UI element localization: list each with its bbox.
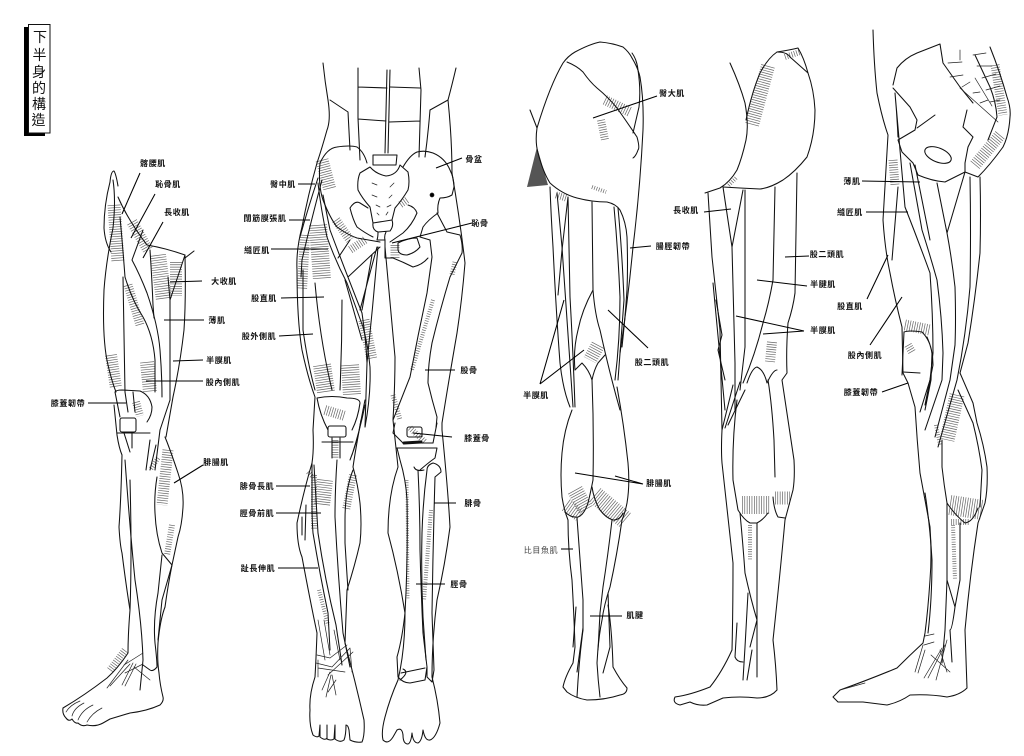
- anterior lower-leg muscles: [302, 460, 353, 667]
- knee and patella: [115, 390, 152, 452]
- labels: medial view: 恥骨肌: [155, 179, 181, 189]
- ankle tendons: [840, 634, 950, 690]
- labels: anterior view: 骨盆: [465, 154, 483, 164]
- labels: anterior view: [240, 154, 490, 589]
- shading: lateral hatching: [893, 65, 1003, 580]
- labels: lateral view: [837, 176, 920, 397]
- labels: anterior view: 闊筋膜張肌: [244, 213, 286, 223]
- labels: posterior view: 臀大肌: [659, 88, 685, 98]
- labels: lateral-posterior view: 半腱肌: [810, 279, 836, 289]
- abdominal muscles: [330, 68, 448, 160]
- figure: anterior view with muscles and skeleton: [297, 63, 465, 744]
- labels: medial view: 半膜肌: [206, 355, 232, 365]
- figure: lateral-posterior view of leg: [673, 48, 844, 705]
- sacrum foramina: [372, 183, 434, 215]
- gluteus and outer outline: [530, 42, 643, 353]
- vertebrae: [948, 50, 1000, 122]
- femur lower end, patella, tibia and fibula: [393, 423, 441, 683]
- labels: posterior view: 腓腸肌: [646, 478, 672, 488]
- labels: medial view: [51, 158, 240, 483]
- figure: lateral view with pelvis and spine: [833, 30, 1010, 705]
- shading: muscle hatching: [110, 205, 176, 670]
- thigh straps and knee: [892, 93, 980, 447]
- thigh outlines: [104, 171, 194, 400]
- lower-leg lines and ankle: [925, 440, 978, 663]
- labels: posterior view: [523, 88, 690, 620]
- shading: posterior hatching: [527, 100, 630, 520]
- ankle retinaculum: [316, 620, 353, 697]
- knee and patella (muscled leg): [317, 396, 365, 460]
- labels: anterior view: 股直肌: [251, 293, 277, 303]
- labels: anterior view: 脛骨: [450, 580, 468, 589]
- labels: posterior view: 比目魚肌: [524, 545, 558, 555]
- ankle tendons and toes: [66, 653, 150, 722]
- labels: anterior view: 股骨: [460, 366, 478, 375]
- figure: posterior view of leg: [523, 42, 690, 700]
- figure: medial view of right leg: [63, 171, 194, 726]
- hamstrings: [550, 187, 624, 410]
- labels: anterior view: 趾長伸肌: [241, 563, 275, 573]
- labels: posterior view: 股二頭肌: [635, 358, 669, 367]
- labels: medial view: 薄肌: [208, 315, 226, 325]
- labels: anterior view: 臀中肌: [270, 179, 296, 189]
- title: 下半身的構造: 身: [32, 64, 46, 80]
- labels: lateral view: 薄肌: [843, 176, 861, 186]
- lower-leg tendons: [735, 513, 757, 680]
- thigh muscles: [713, 187, 785, 523]
- labels: medial view: 髂腰肌: [140, 158, 166, 168]
- labels: medial view: 股內側肌: [206, 377, 240, 387]
- labels: medial view: 膝蓋韌帶: [51, 398, 85, 408]
- pelvis and spine: [893, 44, 1010, 233]
- lower leg and foot: [63, 397, 183, 726]
- labels: posterior view: 腸脛韌帶: [656, 241, 690, 251]
- labels: medial view: 大收肌: [211, 276, 237, 286]
- labels: anterior view: 腓骨長肌: [240, 481, 274, 491]
- pelvis bones: [319, 146, 462, 428]
- labels: posterior view: 半膜肌: [523, 390, 549, 400]
- labels: posterior view: 肌腱: [626, 610, 644, 620]
- shading: anterior hatching: [302, 160, 455, 625]
- labels: medial view: 長收肌: [164, 207, 190, 217]
- labels: anterior view: 股外側肌: [242, 331, 276, 341]
- labels: lateral view: 股內側肌: [848, 350, 882, 360]
- labels: anterior view: 恥骨: [471, 218, 489, 228]
- labels: lateral view: 縫匠肌: [837, 207, 863, 217]
- labels: lateral view: 膝蓋韌帶: [844, 387, 878, 397]
- labels: lateral-posterior view: 股二頭肌: [810, 250, 844, 259]
- calves and heel: [561, 380, 629, 700]
- title: 下半身的構造: 造: [32, 112, 46, 128]
- title: 下半身的構造: 構: [32, 96, 46, 112]
- shading: gluteal and calf hatching: [728, 52, 800, 560]
- labels: anterior view: 脛骨前肌: [240, 508, 274, 518]
- labels: anterior view: 膝蓋骨: [464, 433, 490, 443]
- title: 下半身的構造: [24, 24, 50, 136]
- labels: medial view: 腓腸肌: [203, 457, 229, 467]
- hip and outer outline: [674, 48, 815, 705]
- labels: lateral-posterior view: 半膜肌: [810, 325, 836, 335]
- title: 下半身的構造: 半: [32, 47, 46, 63]
- title: 下半身的構造: 的: [32, 80, 46, 96]
- labels: lateral view: 股直肌: [837, 301, 863, 311]
- anterior thigh muscles: [300, 178, 380, 427]
- front and back outlines: [833, 30, 987, 705]
- labels: lateral-posterior view: 長收肌: [673, 205, 699, 215]
- labels: anterior view: 縫匠肌: [244, 245, 270, 255]
- body outline and legs: [297, 63, 465, 744]
- labels: lateral-posterior view: [673, 205, 844, 335]
- labels: anterior view: 腓骨: [464, 498, 482, 508]
- title: 下半身的構造: 下: [33, 29, 47, 45]
